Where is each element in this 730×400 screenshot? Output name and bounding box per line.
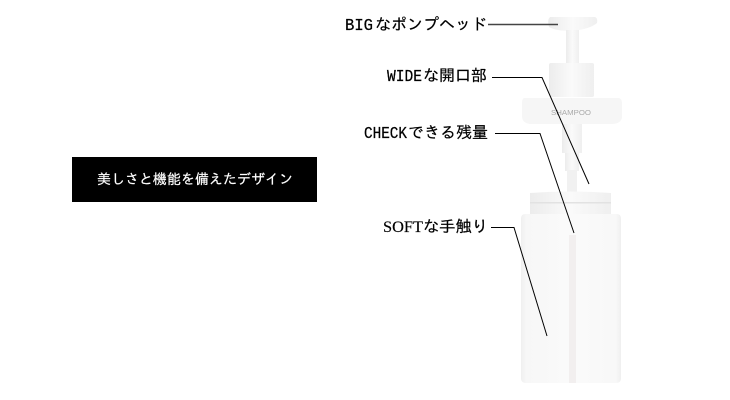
label: big pump head: なポンプヘッド xyxy=(375,16,487,34)
label: check remaining amount xyxy=(364,125,574,233)
pump stem xyxy=(566,30,579,63)
pump flange with product name xyxy=(522,98,622,124)
label: big pump head xyxy=(345,16,558,36)
label: check remaining amount: CHECK xyxy=(364,125,408,144)
label: soft touch xyxy=(383,218,547,336)
label: soft touch: な手触り xyxy=(423,218,488,236)
pump collar xyxy=(549,63,594,97)
bottle neck xyxy=(530,192,611,214)
pump lower shaft xyxy=(562,124,582,153)
bottle body xyxy=(521,214,621,383)
label: check remaining amount: できる残量 xyxy=(408,125,488,142)
dip tube xyxy=(567,170,577,204)
product: pump bottle xyxy=(521,17,622,383)
pump head xyxy=(548,17,597,31)
label: wide opening: な開口部 xyxy=(423,68,487,85)
banner: design heading xyxy=(72,157,317,202)
label: big pump head: BIG xyxy=(345,17,373,36)
pump flange with product name: SHAMPOO xyxy=(551,110,592,117)
label: soft touch: SOFT xyxy=(383,219,423,236)
label: wide opening xyxy=(387,68,589,184)
label: wide opening: WIDE xyxy=(387,68,422,87)
bottle centre strip xyxy=(569,235,576,383)
banner: design heading: 美しさと機能を備えたデザイン xyxy=(97,171,293,187)
